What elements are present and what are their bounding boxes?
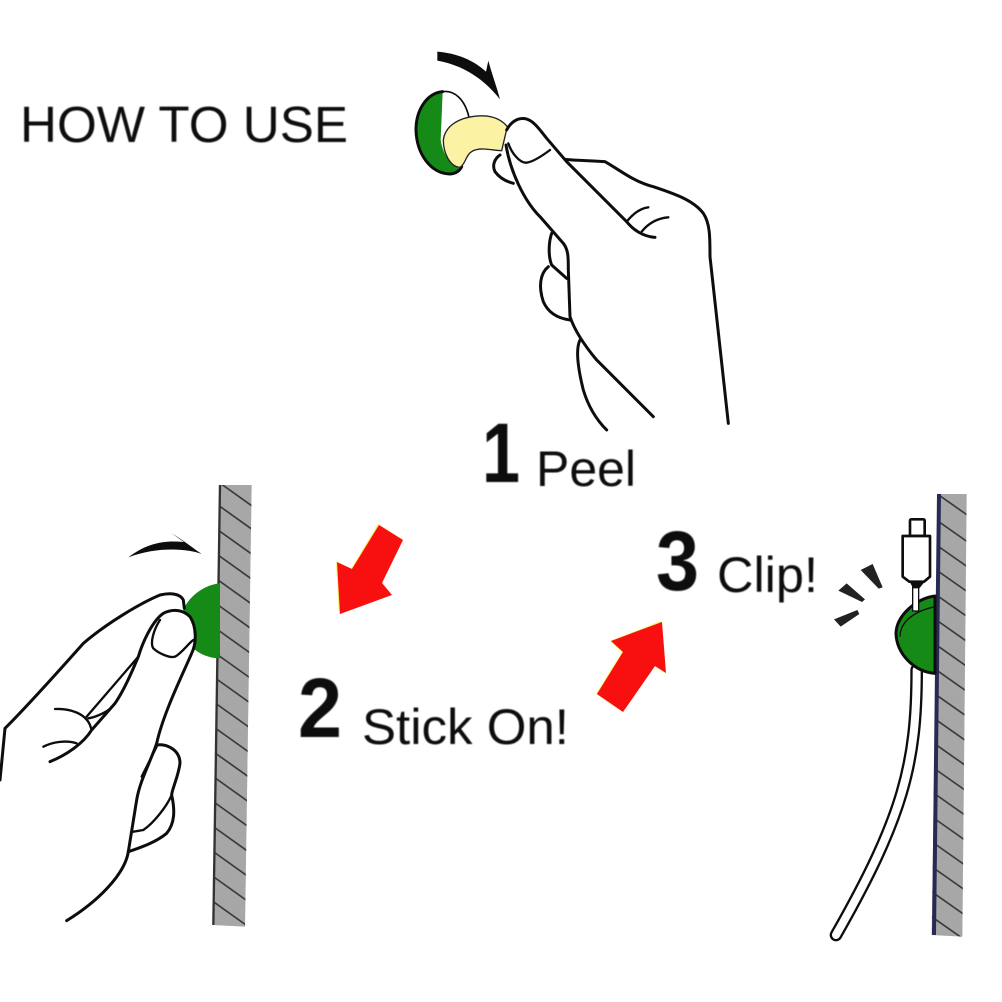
step 1 label: Peel (536, 441, 636, 497)
icon: cable inner (836, 670, 917, 935)
icon: hatched wall (213, 478, 260, 935)
panel: step 3 clip illustration (834, 490, 977, 948)
icon: arrow peel direction (437, 52, 500, 99)
icon: green clip with white face (416, 91, 469, 174)
step 2 label (298, 661, 569, 755)
step 1 label (482, 406, 636, 500)
icon: peeled yellow backing (443, 116, 507, 167)
panel: step 2 stick on illustration (0, 478, 260, 935)
panel: step 1 peel illustration (416, 52, 728, 430)
step 3 label: 3 (656, 514, 699, 608)
icon: cable neck (913, 585, 919, 611)
icon: green clip on wall (181, 583, 220, 658)
icon: hatched wall (932, 494, 967, 937)
icon: green cable clip (896, 596, 935, 673)
step 2 label: Stick On! (362, 699, 569, 755)
icon: hand pinching (494, 118, 728, 430)
title: HOW TO USE (20, 96, 348, 153)
icon: hand pressing clip (0, 594, 195, 921)
step 3 label: Clip! (717, 547, 818, 603)
icon: arrow press direction (128, 533, 202, 557)
icon: usb plug (903, 519, 930, 588)
step 3 label (656, 514, 818, 608)
arrow: step 2 to step 3 (596, 621, 666, 712)
icon: click marks (834, 564, 883, 627)
step 1 label: 1 (482, 406, 520, 500)
icon: cable (836, 670, 917, 935)
step 2 label: 2 (298, 661, 342, 755)
arrow: step 1 to step 2 (336, 524, 403, 614)
